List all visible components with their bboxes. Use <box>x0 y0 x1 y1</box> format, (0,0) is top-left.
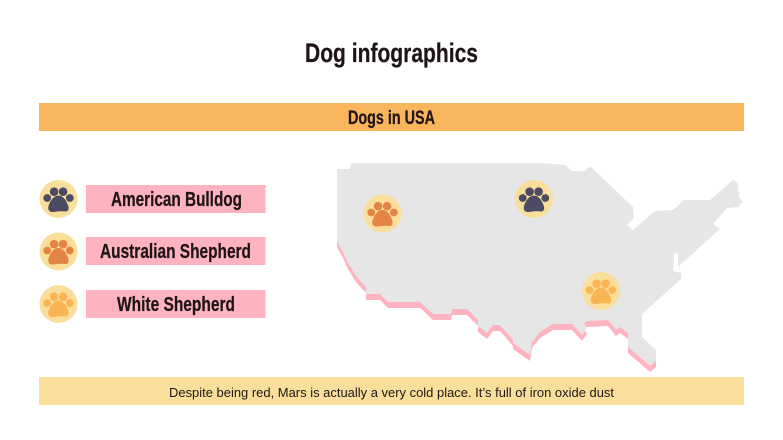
map marker: orange paw <box>364 194 402 232</box>
map marker: light paw <box>582 272 620 310</box>
legend item: American Bulldog: American Bulldog <box>111 189 242 211</box>
map shadow: south coast <box>337 200 656 372</box>
legend item: Australian Shepherd <box>40 232 266 270</box>
legend item: White Shepherd <box>40 285 266 323</box>
header banner: Dogs in USA <box>39 103 744 131</box>
map marker: dark paw <box>515 180 553 218</box>
title: Dog infographics <box>305 38 478 68</box>
legend: dog breeds <box>40 180 266 323</box>
legend item: Australian Shepherd: Australian Shepherd <box>100 241 251 263</box>
header banner: Dogs in USA: Dogs in USA <box>348 108 435 129</box>
legend item: American Bulldog <box>40 180 266 218</box>
footer banner text: Despite being red, Mars is actually a very cold place. It’s full of iron oxide dust <box>169 385 614 400</box>
footer banner text <box>39 377 744 405</box>
legend item: White Shepherd: White Shepherd <box>117 294 235 316</box>
map land <box>337 163 743 366</box>
USA map <box>337 163 743 372</box>
